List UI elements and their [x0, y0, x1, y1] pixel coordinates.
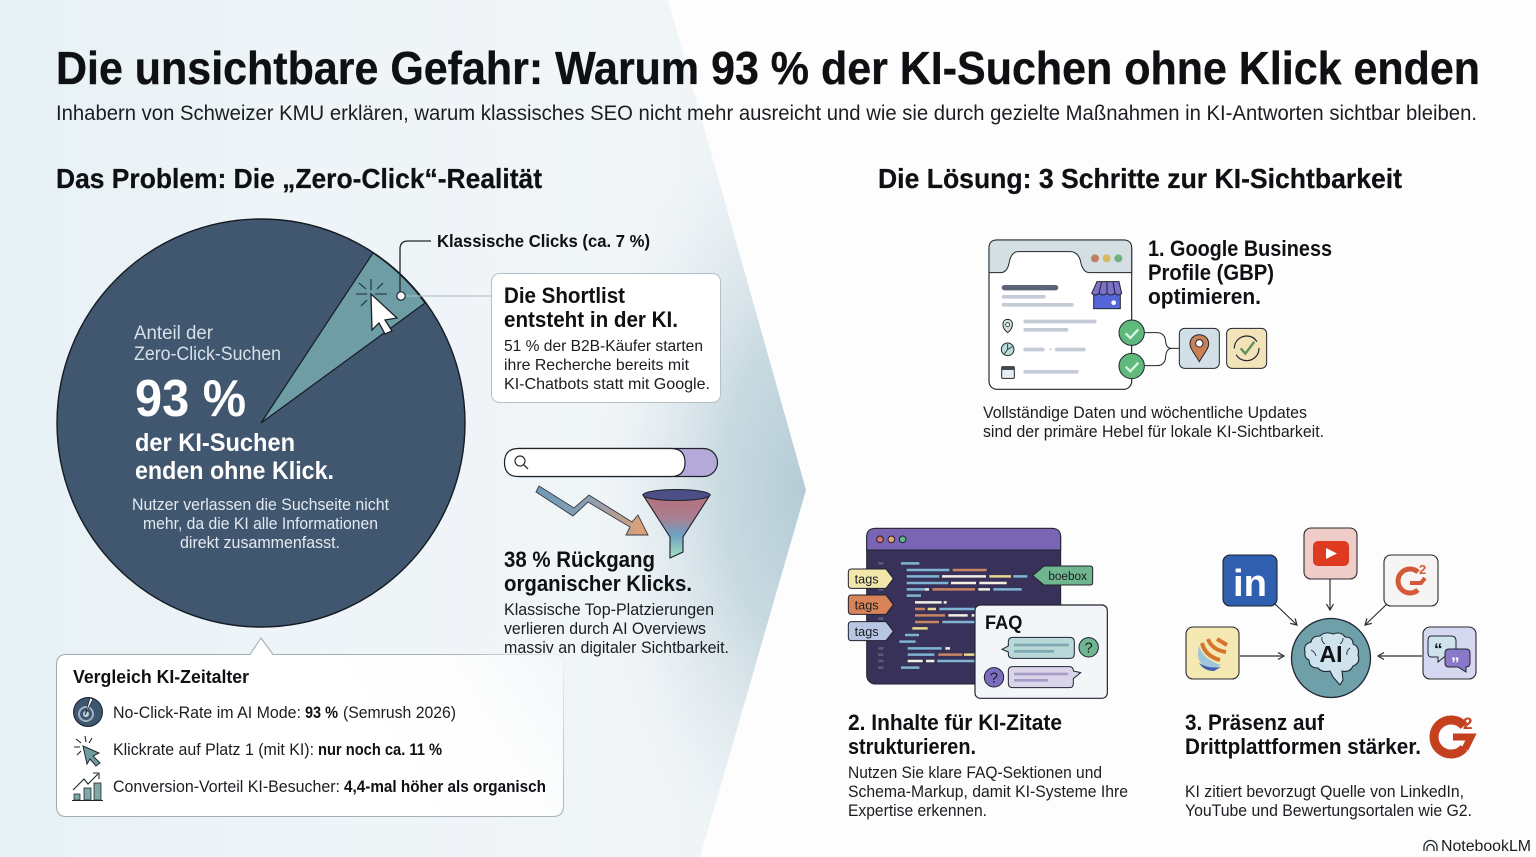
icon: LinkedIn	[1223, 555, 1277, 606]
row: click rate: nur noch ca. 11 %	[318, 740, 442, 759]
text: decline explanation	[504, 601, 729, 657]
heading: step 3: 3. Präsenz auf	[1185, 710, 1325, 735]
heading: step 1: Profile (GBP)	[1148, 260, 1274, 285]
heading: 38 % decline: organischer Klicks.	[504, 571, 692, 596]
text: decline explanation: verlieren durch AI Overviews	[504, 620, 706, 638]
tags: tags	[855, 625, 879, 639]
icon: YouTube	[1304, 528, 1357, 579]
heading: step 1: 1. Google Business	[1148, 236, 1332, 261]
shortlist text: KI-Chatbots statt mit Google.	[504, 376, 710, 393]
comparison heading: Vergleich KI-Zeitalter	[73, 667, 249, 687]
heading: step 2: strukturieren.	[848, 734, 976, 759]
panel: comparison	[56, 638, 564, 816]
pie value: 93 %: 93 %	[135, 370, 246, 428]
pie statement: der KI-Suchen	[135, 429, 295, 457]
shortlist text: 51 % der B2B-Käufer starten	[504, 338, 703, 355]
heading: problem: Das Problem: Die „Zero-Click“-Realität	[56, 163, 542, 194]
text: step 3: YouTube und Bewertungsortalen wie G2.	[1185, 802, 1472, 820]
heading: step 3: Drittplattformen stärker.	[1185, 734, 1421, 759]
icon: quotes tile	[1423, 627, 1476, 679]
heading: step 1: optimieren.	[1148, 284, 1261, 309]
text: step 1: sind der primäre Hebel für lokale KI-Sichtbarkeit.	[983, 423, 1324, 441]
row: conversion advantage: 4,4-mal höher als organisch	[344, 777, 546, 796]
panel: shortlist	[492, 274, 720, 402]
tag: boebox: boebox	[1048, 569, 1088, 583]
tags: tags	[855, 572, 879, 586]
watermark: NotebookLM: NotebookLM	[1441, 838, 1531, 855]
shortlist heading: entsteht in der KI.	[504, 307, 678, 332]
shortlist text: ihre Recherche bereits mit	[504, 357, 690, 374]
callout: classic clicks label	[397, 231, 650, 300]
icon: AI brain: AI	[1320, 641, 1342, 667]
shortlist text	[504, 338, 710, 393]
icon: quotes tile: “	[1434, 640, 1442, 659]
pie label: share of zero-click searches	[134, 323, 281, 365]
panel: FAQ	[975, 605, 1107, 698]
text: step 1: Vollständige Daten und wöchentliche Updates	[983, 404, 1307, 422]
text: decline explanation: Klassische Top-Platzierungen	[504, 601, 714, 619]
pie statement: enden ohne Klick.	[135, 457, 334, 485]
text: step 2: Nutzen Sie klare FAQ-Sektionen und	[848, 764, 1102, 782]
row: conversion advantage	[72, 773, 546, 800]
pie statement	[135, 429, 334, 485]
illustration: business profile window	[989, 240, 1132, 389]
panel: FAQ: ?	[990, 671, 998, 687]
heading: step 2	[848, 710, 1062, 759]
shortlist heading	[504, 283, 678, 332]
icon: location tile	[1179, 328, 1219, 368]
text: step 1	[983, 404, 1324, 441]
row: no-click rate: 93 %	[305, 703, 338, 722]
subtitle: Inhabern von Schweizer KMU erklären, warum klassisches SEO nicht mehr ausreicht und wie sie durch gezielte Maßnahmen in KI-Antworten sichtbar bleiben.	[56, 102, 1477, 125]
panel: FAQ: FAQ	[985, 613, 1022, 634]
title: Die unsichtbare Gefahr: Warum 93 % der KI-Suchen ohne Klick enden	[56, 42, 1480, 94]
icon: funnel	[643, 490, 710, 558]
icon: review platform	[1186, 627, 1239, 679]
diagram: platforms to AI	[1186, 528, 1476, 698]
icon: large G2 logo	[1434, 714, 1472, 754]
row: conversion advantage: Conversion-Vorteil KI-Besucher:	[113, 777, 340, 796]
icon: large G2 logo: 2	[1463, 714, 1472, 733]
pie wedge: classic clicks	[261, 253, 425, 423]
arrows to AI	[1240, 579, 1422, 656]
icon: G2	[1384, 555, 1438, 606]
heading: step 1	[1148, 236, 1332, 309]
pie label: share of zero-click searches: Anteil der	[134, 323, 214, 344]
panel: FAQ: ?	[1085, 641, 1093, 657]
pie explanation: direkt zusammenfasst.	[180, 533, 340, 552]
text: step 2	[848, 764, 1128, 820]
pie explanation: Nutzer verlassen die Suchseite nicht	[132, 495, 389, 514]
arrow: falling clicks	[536, 486, 648, 535]
tags: tags	[855, 598, 879, 612]
heading: solution: Die Lösung: 3 Schritte zur KI-Sichtbarkeit	[878, 163, 1402, 194]
connector and check marks	[1119, 320, 1180, 379]
tag: boebox	[1033, 566, 1093, 585]
text: step 3: KI zitiert bevorzugt Quelle von LinkedIn,	[1185, 783, 1464, 801]
icon: quotes tile: ”	[1451, 654, 1460, 673]
icon: AI brain	[1292, 618, 1370, 698]
heading: 38 % decline: 38 % Rückgang	[504, 547, 655, 572]
shortlist heading: Die Shortlist	[504, 283, 626, 308]
icon: update tile	[1227, 328, 1267, 368]
callout: classic clicks label: Klassische Clicks (ca. 7 %)	[437, 231, 650, 251]
pie label: share of zero-click searches: Zero-Click-Suchen	[134, 344, 281, 365]
tags	[848, 569, 893, 641]
pie chart: zero-click share	[57, 219, 465, 627]
icon: cursor with click sparks	[356, 279, 397, 334]
icon: LinkedIn: in	[1233, 563, 1267, 605]
row: no-click rate: (Semrush 2026)	[343, 703, 456, 722]
row: no-click rate: No-Click-Rate im AI Mode:	[113, 703, 301, 722]
row: click rate	[74, 736, 442, 766]
text: decline explanation: massiv an digitaler Sichtbarkeit.	[504, 639, 729, 657]
panel: problem background arrow	[0, 0, 806, 857]
illustration: code window	[867, 528, 1061, 684]
pie explanation	[132, 495, 389, 552]
heading: step 2: 2. Inhalte für KI-Zitate	[848, 710, 1062, 735]
row: no-click rate	[74, 698, 456, 726]
heading: 38 % decline	[504, 547, 692, 596]
icon: G2: 2	[1419, 562, 1426, 577]
text: step 2: Schema-Markup, damit KI-Systeme Ihre	[848, 783, 1128, 801]
text: step 3	[1185, 783, 1472, 820]
icon: search bar	[504, 448, 718, 476]
text: step 2: Expertise erkennen.	[848, 802, 987, 820]
heading: step 3	[1185, 710, 1421, 759]
row: click rate: Klickrate auf Platz 1 (mit KI):	[113, 740, 314, 759]
pie explanation: mehr, da die KI alle Informationen	[143, 514, 378, 533]
